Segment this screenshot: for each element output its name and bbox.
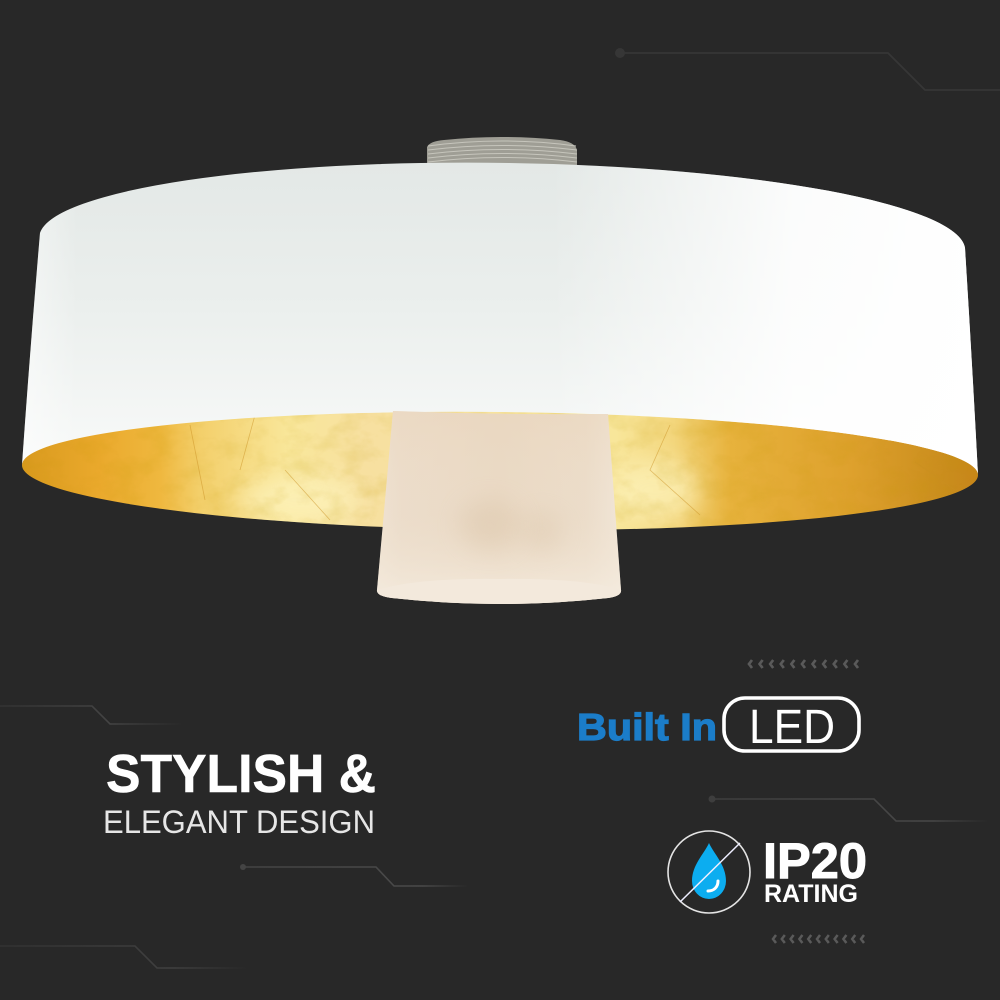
icon: crossed water drop: [668, 831, 750, 913]
white shade: [22, 163, 978, 475]
rating label: RATING: [764, 880, 858, 908]
circuit line: top right: [615, 48, 1000, 90]
built in label: Built In: [577, 707, 717, 749]
circuit line: middle right: [708, 796, 988, 821]
circuit line: left middle: [240, 864, 468, 886]
ip20 label: IP20: [763, 833, 867, 889]
gold interior: [20, 405, 980, 535]
elegant design subheading: ELEGANT DESIGN: [103, 804, 375, 840]
chevrons: upper row: [749, 660, 858, 668]
ip20 rating: [668, 831, 867, 913]
circuit line: left lower: [0, 946, 248, 968]
ceiling mount: [427, 137, 577, 167]
LED pill: [724, 698, 859, 754]
frosted glass diffuser: [377, 411, 621, 604]
LED pill: LED: [749, 701, 835, 754]
lamp: [20, 137, 980, 604]
circuit line: left upper: [0, 706, 183, 724]
stylish heading: STYLISH &: [106, 744, 376, 804]
headline: [103, 744, 376, 840]
built in LED badge: [577, 698, 859, 754]
chevrons: lower row: [773, 935, 864, 943]
